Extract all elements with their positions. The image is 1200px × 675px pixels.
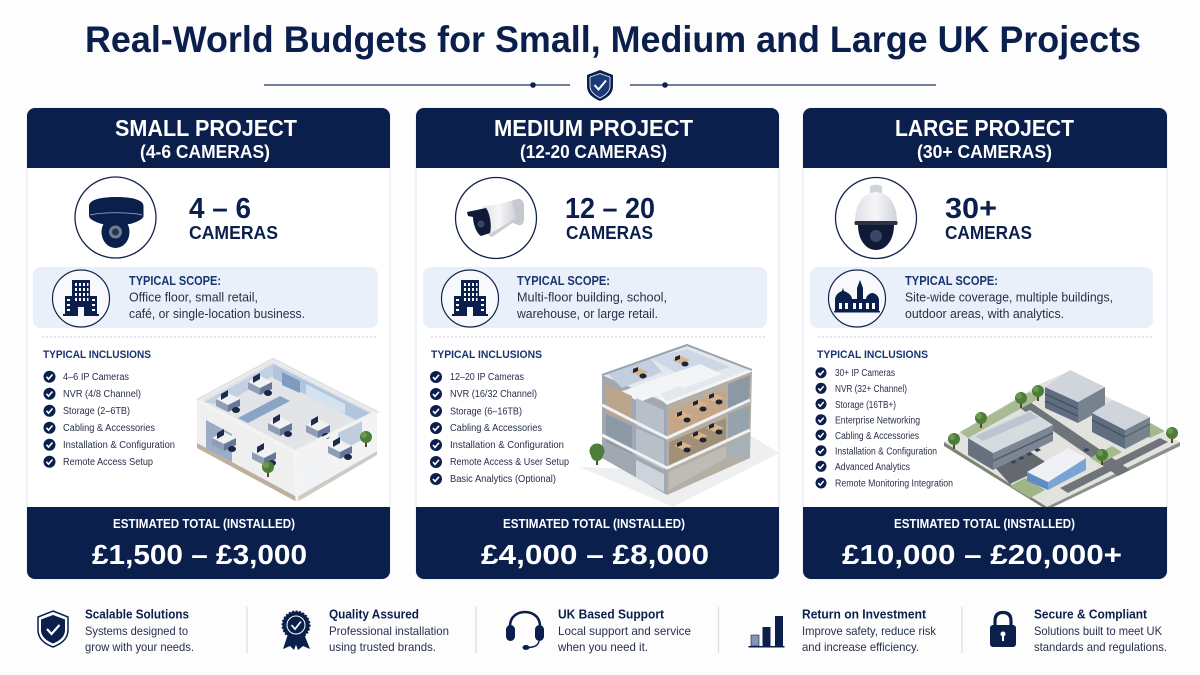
typical inclusions list: Storage (2–6TB): [63, 406, 130, 417]
typical scope: outdoor areas, with analytics.: [905, 307, 1064, 321]
typical inclusions list: 30+ IP Cameras: [835, 368, 895, 379]
typical scope: warehouse, or large retail.: [516, 307, 658, 321]
typical scope: TYPICAL SCOPE:: [517, 274, 610, 288]
typical scope: TYPICAL SCOPE:: [129, 274, 221, 288]
small project price band: £1,500 – £3,000: [92, 539, 307, 570]
camera count: [945, 193, 1032, 243]
medium project price band: £4,000 – £8,000: [481, 539, 709, 570]
benefit: UK based support: when you need it.: [557, 640, 648, 654]
blue unit: [1027, 448, 1086, 490]
typical inclusions list: NVR (16/32 Channel): [450, 389, 537, 400]
typical inclusions list: Cabling & Accessories: [835, 431, 919, 442]
typical inclusions list: NVR (32+ Channel): [835, 384, 907, 395]
benefit: secure and compliant: standards and regulations.: [1034, 640, 1167, 654]
panel: small project: [27, 108, 390, 579]
benefit: quality assured: Professional installation: [329, 624, 449, 638]
benefit: UK based support: Local support and service: [558, 624, 691, 638]
icon: office building: [52, 270, 110, 327]
typical scope: café, or single-location business.: [129, 307, 305, 321]
east office block: [1092, 400, 1150, 449]
medium project price band: [416, 507, 779, 579]
small project price band: ESTIMATED TOTAL (INSTALLED): [113, 516, 295, 531]
camera count: 12 – 20: [565, 193, 655, 225]
typical scope: Multi-floor building, school,: [517, 290, 667, 304]
typical scope: Site-wide coverage, multiple buildings,: [905, 290, 1113, 304]
medium project price band: ESTIMATED TOTAL (INSTALLED): [503, 516, 685, 531]
icon: tower building: [442, 270, 498, 327]
icon: dome camera: [75, 177, 156, 258]
typical inclusions list: Advanced Analytics: [835, 462, 910, 473]
typical inclusions list: 4–6 IP Cameras: [63, 372, 129, 383]
camera count: CAMERAS: [189, 223, 278, 243]
camera count: 4 – 6: [189, 193, 251, 225]
typical inclusions list: Remote Access & User Setup: [450, 457, 569, 468]
illustration: isometric office floor: [197, 359, 377, 502]
benefit: return on investment: [748, 608, 937, 654]
long warehouse: [968, 410, 1053, 470]
icon: campus buildings: [828, 270, 886, 327]
medium project header: (12-20 CAMERAS): [520, 142, 667, 162]
typical inclusions list: NVR (4/8 Channel): [63, 389, 141, 400]
benefit: quality assured: Quality Assured: [329, 608, 419, 622]
benefit: UK based support: [506, 608, 691, 654]
typical inclusions list: [430, 349, 569, 485]
small project header: (4-6 CAMERAS): [140, 142, 270, 162]
typical inclusions list: Installation & Configuration: [63, 440, 175, 451]
benefit: scalable solutions: [38, 608, 194, 654]
typical scope: [423, 267, 767, 328]
title: Real-World Budgets for Small, Medium and Large UK Projects: [85, 19, 1141, 60]
camera count: [189, 193, 278, 243]
benefit: return on investment: Return on Investment: [802, 608, 927, 622]
large project price band: [803, 507, 1167, 579]
large project price band: £10,000 – £20,000+: [842, 539, 1122, 570]
typical inclusions list: Basic Analytics (Optional): [450, 474, 556, 485]
icon: bar chart: [748, 616, 784, 648]
north office block: [1045, 370, 1105, 423]
benefit: scalable solutions: Scalable Solutions: [85, 608, 189, 622]
icon: padlock: [990, 612, 1016, 647]
icon: bullet camera: [456, 178, 536, 258]
benefit: UK based support: UK Based Support: [558, 608, 665, 622]
small project header: SMALL PROJECT: [115, 115, 297, 141]
typical inclusions list: TYPICAL INCLUSIONS: [43, 349, 151, 361]
typical inclusions list: Remote Monitoring Integration: [835, 478, 953, 490]
medium project header: [416, 108, 779, 168]
benefit: secure and compliant: Solutions built to meet UK: [1034, 624, 1162, 638]
typical inclusions list: TYPICAL INCLUSIONS: [817, 349, 928, 361]
large project price band: ESTIMATED TOTAL (INSTALLED): [894, 516, 1075, 531]
icon: PTZ camera: [836, 178, 916, 258]
typical inclusions list: Installation & Configuration: [450, 440, 564, 451]
benefit: quality assured: using trusted brands.: [329, 640, 436, 654]
benefit: scalable solutions: grow with your needs.: [85, 640, 194, 654]
typical inclusions list: TYPICAL INCLUSIONS: [431, 349, 542, 361]
typical scope: [810, 267, 1153, 328]
benefit: scalable solutions: Systems designed to: [85, 624, 188, 638]
camera count: CAMERAS: [945, 223, 1032, 243]
typical scope: TYPICAL SCOPE:: [905, 274, 998, 288]
panel: medium project: [416, 108, 779, 579]
icon: headset: [506, 612, 544, 650]
typical inclusions list: 12–20 IP Cameras: [450, 372, 524, 383]
large project header: [803, 108, 1167, 168]
typical inclusions list: Installation & Configuration: [835, 446, 937, 458]
icon: shield: [38, 611, 68, 647]
medium project header: MEDIUM PROJECT: [494, 115, 693, 141]
benefit: quality assured: [282, 608, 449, 654]
typical scope: [33, 267, 378, 328]
typical inclusions list: Cabling & Accessories: [63, 423, 155, 434]
benefit: return on investment: Improve safety, reduce risk: [802, 624, 937, 638]
large project header: (30+ CAMERAS): [917, 142, 1052, 162]
typical inclusions list: Remote Access Setup: [63, 457, 153, 468]
typical inclusions list: Storage (6–16TB): [450, 406, 522, 418]
typical inclusions list: [816, 349, 953, 490]
typical inclusions list: Storage (16TB+): [835, 400, 896, 411]
large project header: LARGE PROJECT: [895, 115, 1074, 141]
typical inclusions list: [43, 349, 175, 468]
title divider with shield: [264, 70, 936, 101]
small project header: [27, 108, 390, 168]
illustration: business campus: [944, 370, 1180, 510]
benefit: secure and compliant: [990, 608, 1167, 654]
benefit: return on investment: and increase efficiency.: [802, 640, 919, 654]
icon: rosette: [282, 612, 310, 650]
illustration: multi-storey building: [580, 345, 779, 507]
camera count: 30+: [945, 193, 997, 225]
benefit: secure and compliant: Secure & Compliant: [1034, 608, 1148, 622]
typical inclusions list: Cabling & Accessories: [450, 423, 542, 434]
typical inclusions list: Enterprise Networking: [835, 416, 920, 426]
camera count: [565, 193, 655, 243]
camera count: CAMERAS: [566, 223, 653, 243]
small project price band: [27, 507, 390, 579]
panel: large project: [803, 108, 1180, 579]
typical scope: Office floor, small retail,: [129, 290, 258, 304]
